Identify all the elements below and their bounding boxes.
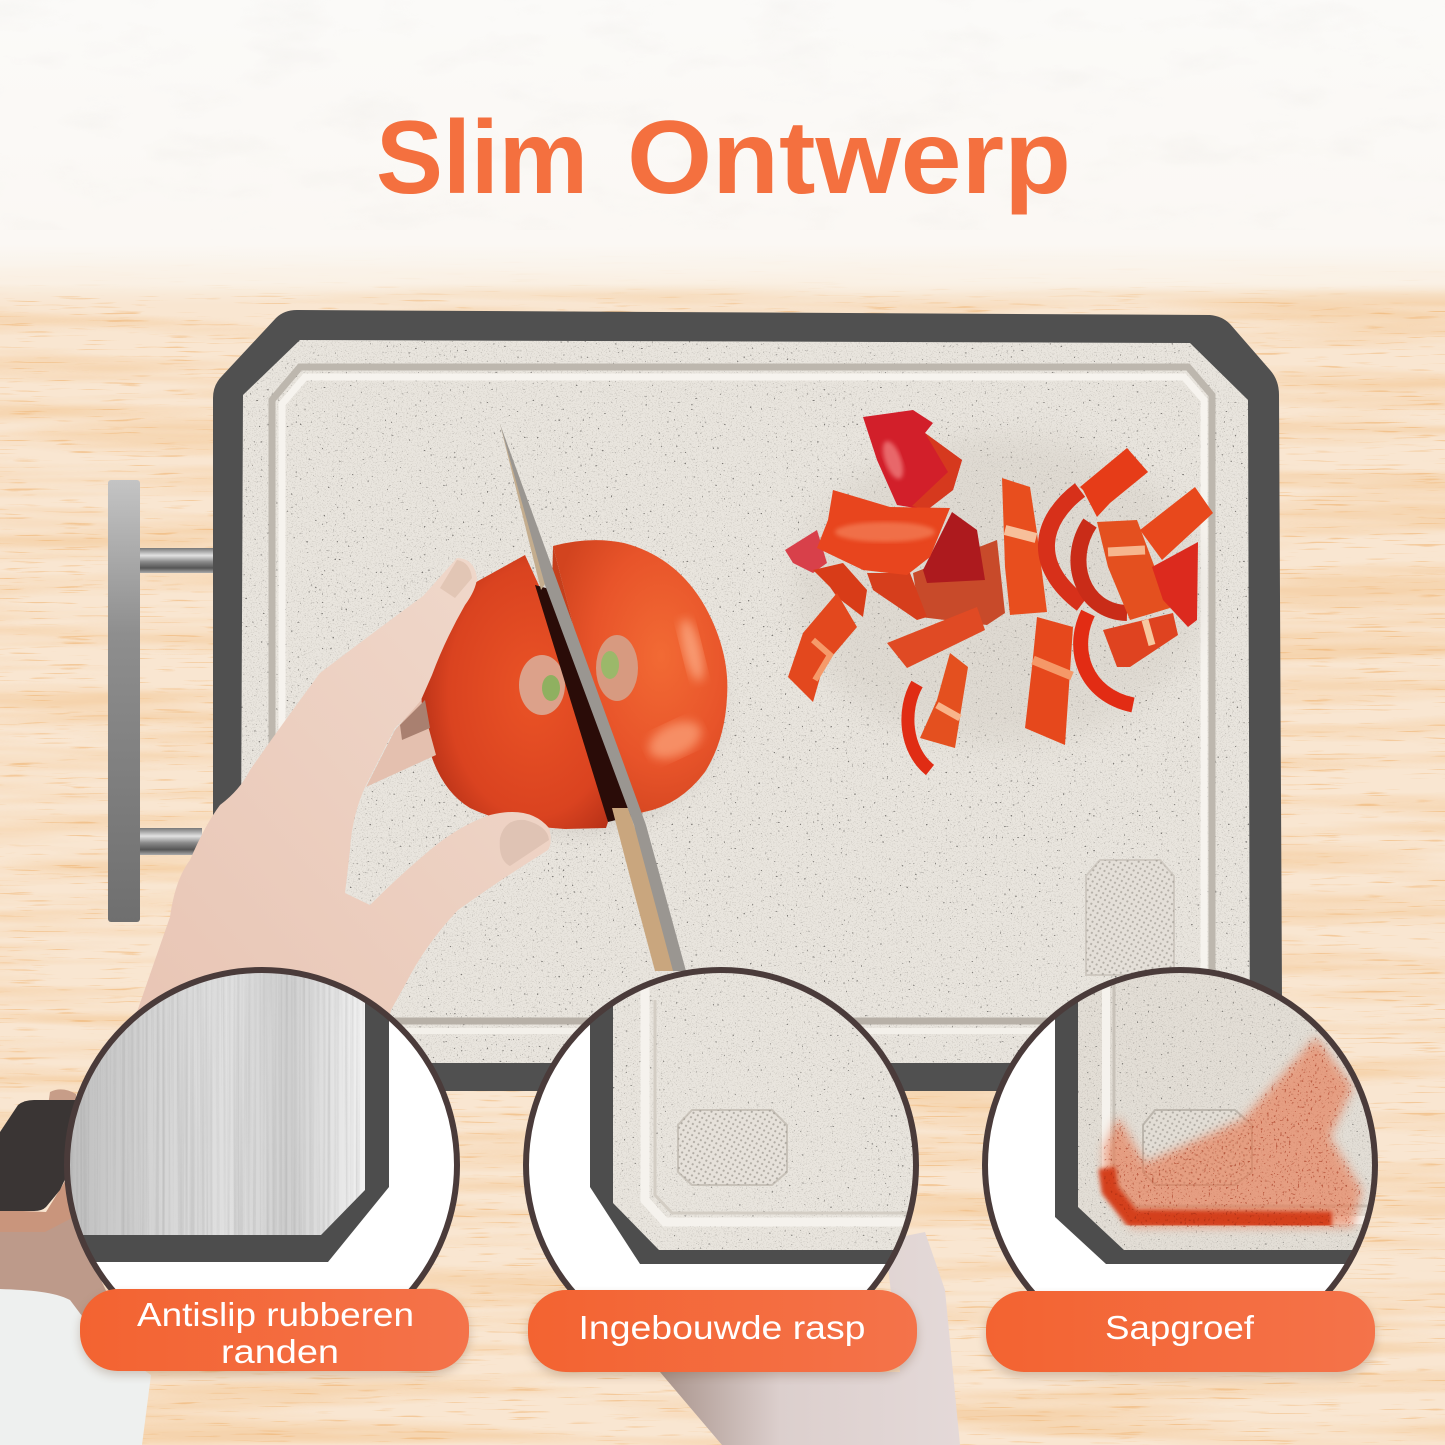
red bell pepper pieces (785, 410, 1213, 770)
index fingernail (440, 560, 472, 598)
dark cut between halves (535, 585, 632, 822)
cutting board (213, 310, 1282, 1091)
hand holding tomato (120, 558, 551, 1060)
brushed steel panel (60, 960, 365, 1235)
shadow under finger (400, 700, 430, 740)
knife upper blade (500, 424, 551, 590)
groove (640, 987, 906, 1226)
wrist and forearm (0, 1215, 120, 1320)
built-in grater (1086, 860, 1174, 975)
knife lower blade tan (612, 808, 684, 971)
juice stain (1104, 1037, 1362, 1227)
rubber border (1055, 1002, 1352, 1264)
label pill: grater (528, 1290, 917, 1376)
board surface (1078, 973, 1372, 1250)
juice groove (272, 367, 1212, 1031)
label pill: rubber edge: randen (221, 1333, 339, 1370)
pepper piece large dark (863, 410, 962, 510)
tomato shadow (425, 575, 725, 835)
board handle (108, 480, 213, 922)
pepper shadow (795, 435, 1205, 745)
knife (500, 424, 686, 971)
tomato left half (422, 555, 608, 829)
rubber border (83, 1003, 389, 1262)
label pill: rubber edge (80, 1289, 469, 1375)
grater (678, 1110, 787, 1185)
thumb nail (500, 820, 549, 866)
handle bar lower (140, 828, 202, 855)
sleeve (0, 1289, 151, 1445)
board rubber edge (213, 310, 1282, 1091)
grater (1143, 1110, 1252, 1185)
second hand at bottom (660, 1232, 960, 1445)
finger behind tomato (366, 700, 436, 787)
handle bar upper (140, 548, 213, 573)
detail circle: grater (523, 967, 919, 1290)
tomato (422, 540, 727, 835)
title: Ontwerp (627, 100, 1071, 216)
wristwatch (0, 1089, 76, 1232)
hand main shape (120, 558, 551, 1060)
detail circle: rubber edge (64, 967, 460, 1290)
label pill: juice groove (986, 1291, 1375, 1377)
label pill: grater: Ingebouwde rasp (578, 1309, 866, 1346)
board surface (240, 340, 1250, 1063)
board surface (613, 973, 913, 1250)
label pill: juice groove: Sapgroef (1105, 1309, 1255, 1346)
groove (1102, 986, 1365, 1224)
label pill: rubber edge: Antislip rubberen (137, 1296, 414, 1333)
handle grip (108, 480, 140, 922)
tomato right half (552, 540, 727, 816)
juice in groove (1107, 1168, 1332, 1220)
knife edge (500, 424, 686, 971)
detail circle: juice groove (982, 967, 1378, 1291)
rubber border (590, 1006, 893, 1264)
title: Slim (376, 100, 588, 216)
